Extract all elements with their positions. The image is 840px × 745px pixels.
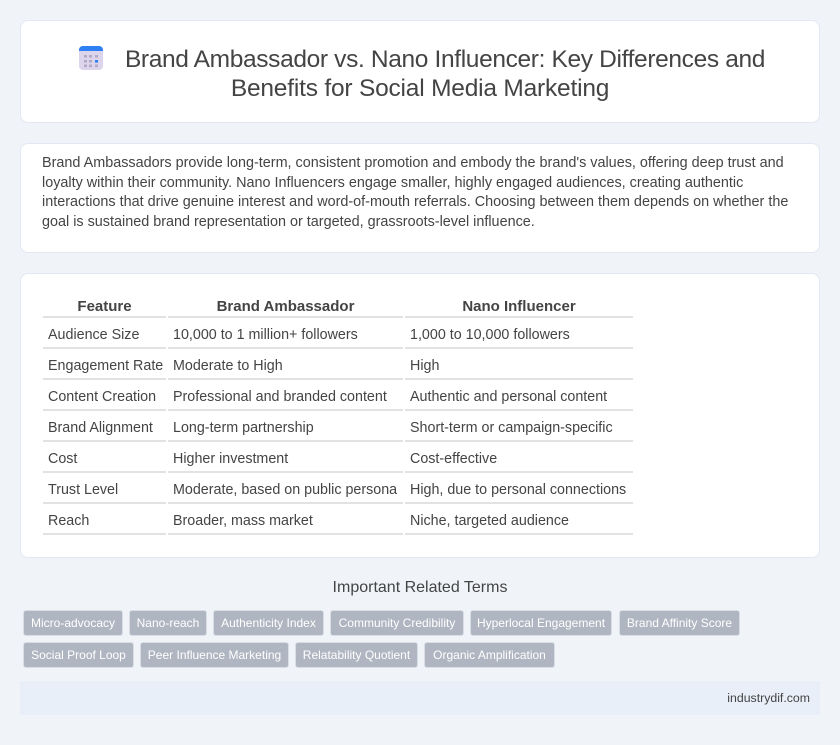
- table row: reach: [43, 513, 633, 535]
- table row: cost: Cost-effective: [410, 451, 497, 467]
- table row: trust level: High, due to personal connections: [410, 482, 626, 498]
- table row: brand alignment: Short-term or campaign-specific: [410, 420, 613, 436]
- panel: header: [20, 20, 820, 123]
- table row: brand alignment: [43, 420, 633, 442]
- table row: cost: Cost: [48, 451, 77, 467]
- related terms tags: Brand Affinity Score: [627, 616, 732, 630]
- table row: reach: Reach: [48, 513, 89, 529]
- table row: engagement rate: High: [410, 358, 439, 374]
- heading: related terms: Important Related Terms: [333, 579, 507, 596]
- related terms tags: [23, 610, 740, 668]
- panel: description: [20, 143, 820, 253]
- table header: Brand Ambassador: [217, 298, 354, 315]
- icon: calendar: [79, 46, 103, 70]
- table row: trust level: [43, 482, 633, 504]
- table row: trust level: Trust Level: [48, 482, 118, 498]
- related terms tags: Relatability Quotient: [303, 648, 410, 662]
- table row: brand alignment: Brand Alignment: [48, 420, 153, 436]
- text block: description: [42, 155, 788, 230]
- table row: content creation: Content Creation: [48, 389, 156, 405]
- table row: audience size: Audience Size: [48, 327, 139, 343]
- text block: description: Brand Ambassadors provide long-term, consistent promotion and embody the brand's values, offering deep trust and: [42, 155, 784, 171]
- table row: trust level: Moderate, based on public persona: [173, 482, 397, 498]
- text block: description: goal is sustained brand representation or targeted, grassroots-level influence.: [42, 214, 535, 230]
- table header: [43, 298, 633, 318]
- table row: engagement rate: Moderate to High: [173, 358, 283, 374]
- table row: audience size: [43, 327, 633, 349]
- title: [125, 46, 765, 102]
- footer: industrydif.com: [727, 691, 810, 705]
- related terms tags: Community Credibility: [339, 616, 455, 630]
- table row: reach: Broader, mass market: [173, 513, 313, 529]
- related terms tags: Micro-advocacy: [31, 616, 115, 630]
- table row: content creation: Authentic and personal content: [410, 389, 607, 405]
- table row: audience size: 10,000 to 1 million+ followers: [173, 327, 358, 343]
- related terms tags: Organic Amplification: [433, 648, 546, 662]
- related terms tags: Social Proof Loop: [31, 648, 126, 662]
- table row: audience size: 1,000 to 10,000 followers: [410, 327, 570, 343]
- table header: Feature: [77, 298, 132, 315]
- title: Brand Ambassador vs. Nano Influencer: Key Differences and: [125, 46, 765, 73]
- text block: description: loyalty within their community. Nano Influencers engage smaller, highly engaged audiences, creating authentic: [42, 175, 743, 191]
- related terms tags: Peer Influence Marketing: [148, 648, 281, 662]
- table row: brand alignment: Long-term partnership: [173, 420, 314, 436]
- related terms tags: Hyperlocal Engagement: [477, 616, 605, 630]
- table row: cost: [43, 451, 633, 473]
- table row: reach: Niche, targeted audience: [410, 513, 569, 529]
- related terms tags: Authenticity Index: [221, 616, 316, 630]
- table header: Nano Influencer: [462, 298, 576, 315]
- panel: comparison table: [20, 273, 820, 558]
- title: Benefits for Social Media Marketing: [231, 75, 609, 102]
- table row: content creation: [43, 389, 633, 411]
- text block: description: interactions that drive genuine interest and word-of-mouth referrals. Choosing between them depends on whether the: [42, 194, 788, 210]
- table row: content creation: Professional and branded content: [173, 389, 387, 405]
- table row: engagement rate: Engagement Rate: [48, 358, 163, 374]
- footer: [20, 681, 820, 715]
- table row: engagement rate: [43, 358, 633, 380]
- table row: cost: Higher investment: [173, 451, 288, 467]
- related terms tags: Nano-reach: [137, 616, 199, 630]
